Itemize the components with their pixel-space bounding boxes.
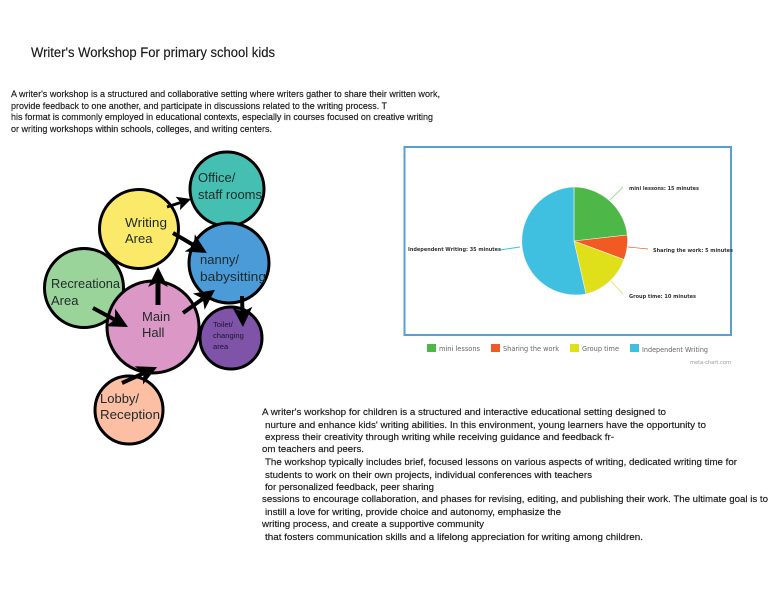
bubble: Main Hall: Hall bbox=[142, 325, 165, 340]
bubble: Toilet/changing area: changing bbox=[213, 331, 244, 340]
bubble: Office/staff rooms: Office/ bbox=[198, 170, 236, 185]
bubble: Toilet/changing area: Toilet/ bbox=[213, 320, 234, 329]
text block: description: instill a love for writing, provide choice and autonomy, emphasize the bbox=[265, 507, 561, 518]
pie slices bbox=[522, 187, 628, 295]
arrow: Writing Area to nanny bbox=[173, 233, 194, 245]
text block: description: nurture and enhance kids' writing abilities. In this environment, young learners have the opportunity to bbox=[265, 420, 706, 431]
arrow: Writing Area to Office bbox=[167, 202, 181, 207]
chart legend: Independent Writing bbox=[642, 346, 708, 354]
pie chart panel bbox=[404, 147, 734, 366]
text block: introduction bbox=[11, 89, 440, 135]
text block: description: A writer's workshop for children is a structured and interactive educational setting designed to bbox=[262, 407, 666, 418]
chart legend: mini lessons bbox=[439, 345, 480, 353]
pie labels: mini lessons: 15 minutes bbox=[629, 186, 700, 192]
bubble: Recreational Area: Area bbox=[51, 293, 79, 308]
arrow: nanny to Toilet bbox=[240, 296, 244, 312]
bubble: Writing Area: Area bbox=[125, 231, 153, 246]
bubble: Office/staff rooms: staff rooms bbox=[198, 187, 262, 202]
bubble: Writing Area: Writing bbox=[125, 215, 167, 230]
arrow: Main Hall to nanny bbox=[183, 299, 203, 313]
pie labels: Group time: 10 minutes bbox=[629, 294, 697, 300]
chart legend bbox=[427, 344, 708, 354]
pie labels: Sharing the work: 5 minutes bbox=[653, 248, 734, 254]
bubble: Main Hall bbox=[107, 281, 199, 373]
text block: description: om teachers and peers. bbox=[262, 444, 364, 455]
bubble: nanny/babysitting: nanny/ bbox=[200, 252, 239, 267]
bubble: Recreational Area: Recreationa bbox=[51, 276, 121, 291]
text block: description: writing process, and create a supportive community bbox=[261, 519, 484, 530]
arrow: Recreational Area to Main Hall bbox=[93, 308, 115, 320]
bubble: Lobby/Reception bbox=[95, 376, 163, 444]
text block: description: sessions to encourage collaboration, and phases for revising, editing, and publishing their work. The ultimate goal is to bbox=[262, 494, 768, 505]
bubble: Toilet/changing area bbox=[200, 307, 262, 369]
text block: description: that fosters communication skills and a lifelong appreciation for writing among children. bbox=[265, 532, 643, 543]
pie labels: Independent Writing: 35 minutes bbox=[408, 247, 502, 253]
text block: introduction: A writer's workshop is a structured and collaborative setting where writers gather to share their written work, bbox=[11, 89, 440, 100]
text block: introduction: his format is commonly employed in educational contexts, especially in courses focused on creative writing bbox=[11, 112, 433, 123]
chart credit: meta-chart.com bbox=[690, 360, 731, 366]
bubble: Lobby/Reception: Lobby/ bbox=[100, 391, 139, 406]
arrow: Main Hall to Writing Area bbox=[156, 282, 160, 305]
arrow: Lobby to Main Hall bbox=[122, 373, 143, 383]
bubble: Recreational Area bbox=[44, 248, 124, 328]
bubble: Main Hall: Main bbox=[142, 309, 170, 324]
chart legend: Group time bbox=[582, 345, 619, 353]
text block: description: students to work on their own projects, individual conferences with teachers bbox=[265, 470, 592, 481]
text block: description: The workshop typically includes brief, focused lessons on various aspects of writing, dedicated writing time for bbox=[265, 457, 738, 468]
bubble: Writing Area bbox=[100, 190, 178, 268]
text block: description: for personalized feedback, peer sharing bbox=[265, 482, 434, 493]
chart frame bbox=[404, 147, 731, 335]
text block: description: express their creativity through writing while receiving guidance and feedback fr- bbox=[265, 432, 614, 443]
bubble: Lobby/Reception: Reception bbox=[100, 407, 160, 422]
text block: introduction: provide feedback to one another, and participate in discussions related to the writing process. T bbox=[11, 101, 387, 112]
text block: description bbox=[261, 407, 768, 543]
bubble: nanny/babysitting: babysitting bbox=[200, 269, 266, 284]
bubble: nanny/babysitting bbox=[189, 223, 269, 303]
title: Writer's Workshop For primary school kids bbox=[31, 45, 275, 60]
bubble: Toilet/changing area: area bbox=[213, 342, 229, 351]
text block: introduction: or writing workshops within schools, colleges, and writing centers. bbox=[11, 124, 272, 135]
bubble diagram: workshop spaces bbox=[44, 152, 269, 444]
pie labels bbox=[408, 186, 734, 300]
bubble: Office/staff rooms bbox=[190, 152, 264, 226]
chart legend: Sharing the work bbox=[503, 345, 560, 353]
